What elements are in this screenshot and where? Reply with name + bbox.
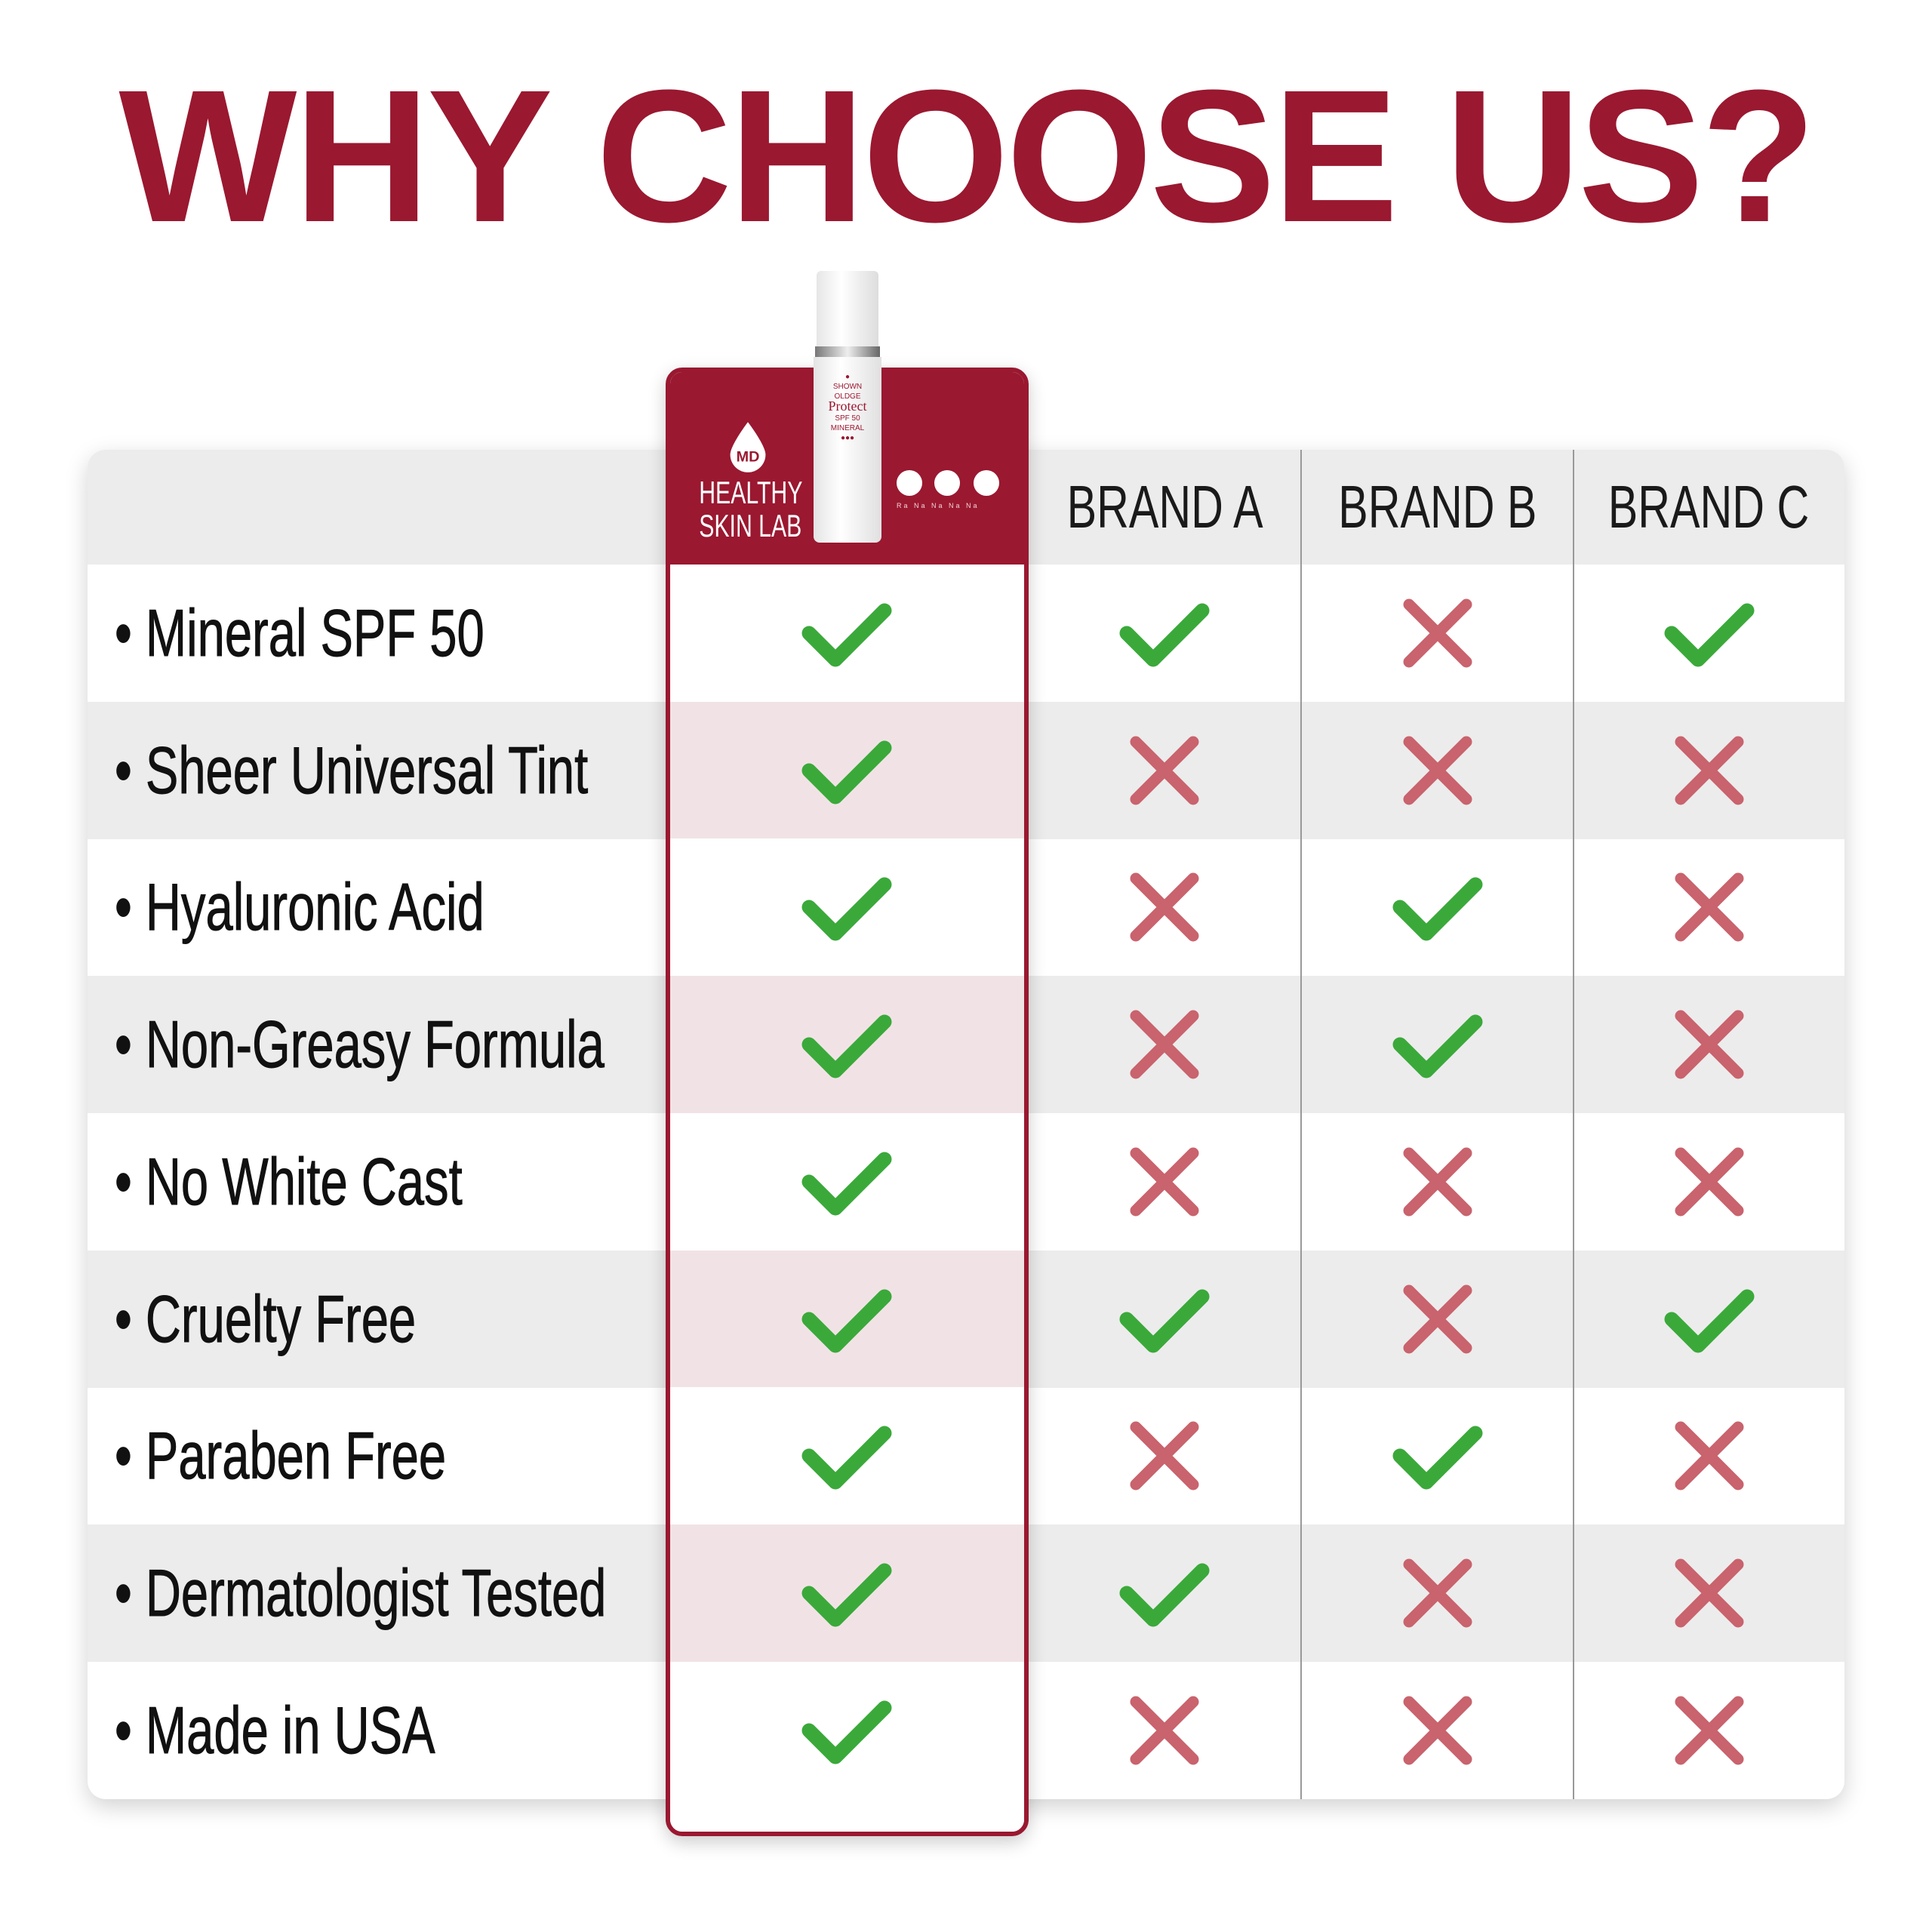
our column checks: [809, 611, 884, 1757]
title: WHY CHOOSE US?: [118, 51, 1814, 261]
product bottle: ●●●: [841, 434, 854, 442]
row 2: [88, 702, 1844, 839]
product bottle: SPF 50: [835, 414, 860, 423]
product bottle: Protect: [829, 398, 866, 414]
product bottle: [814, 271, 881, 543]
row 4: [88, 976, 1844, 1113]
brand header: [670, 372, 1024, 565]
brand B marks: [1400, 605, 1475, 1759]
row 5: • No White Cast: [115, 1144, 463, 1219]
icon: logo drop: MD: [737, 448, 759, 465]
icon: logo drop: [731, 422, 765, 472]
row 6: [88, 1251, 1844, 1388]
brand name: SKIN LAB: [699, 508, 801, 543]
row 8: [88, 1524, 1844, 1662]
row 2: • Sheer Universal Tint: [115, 733, 588, 808]
brand name: HEALTHY: [699, 475, 802, 510]
row 8: • Dermatologist Tested: [115, 1555, 606, 1630]
highlighted column: our brand: [666, 368, 1029, 1836]
header: brand B: BRAND B: [1338, 473, 1537, 540]
row 9: • Made in USA: [115, 1693, 435, 1767]
row 7: • Paraben Free: [115, 1418, 446, 1493]
row 4: • Non-Greasy Formula: [115, 1007, 605, 1081]
body cells: [670, 565, 1024, 702]
icons: badges: [897, 470, 999, 509]
brand name: [699, 475, 802, 543]
comparison table: [88, 450, 1844, 1799]
icons: badges: Ra Na Na Na Na: [897, 502, 980, 509]
product bottle: OLDGE: [834, 392, 860, 401]
row 3: • Hyaluronic Acid: [115, 869, 485, 944]
product bottle: MINERAL: [831, 424, 864, 432]
header: brand C: BRAND C: [1608, 473, 1810, 540]
row 6: • Cruelty Free: [115, 1281, 416, 1356]
column dividers: [1300, 450, 1302, 1799]
header: brand A: BRAND A: [1067, 473, 1263, 540]
header row: [88, 450, 1844, 565]
row 1: • Mineral SPF 50: [115, 595, 485, 670]
product bottle: ●: [845, 373, 850, 381]
brand C marks: [1672, 611, 1747, 1759]
brand A marks: [1127, 611, 1202, 1759]
product bottle: SHOWN: [833, 383, 862, 391]
